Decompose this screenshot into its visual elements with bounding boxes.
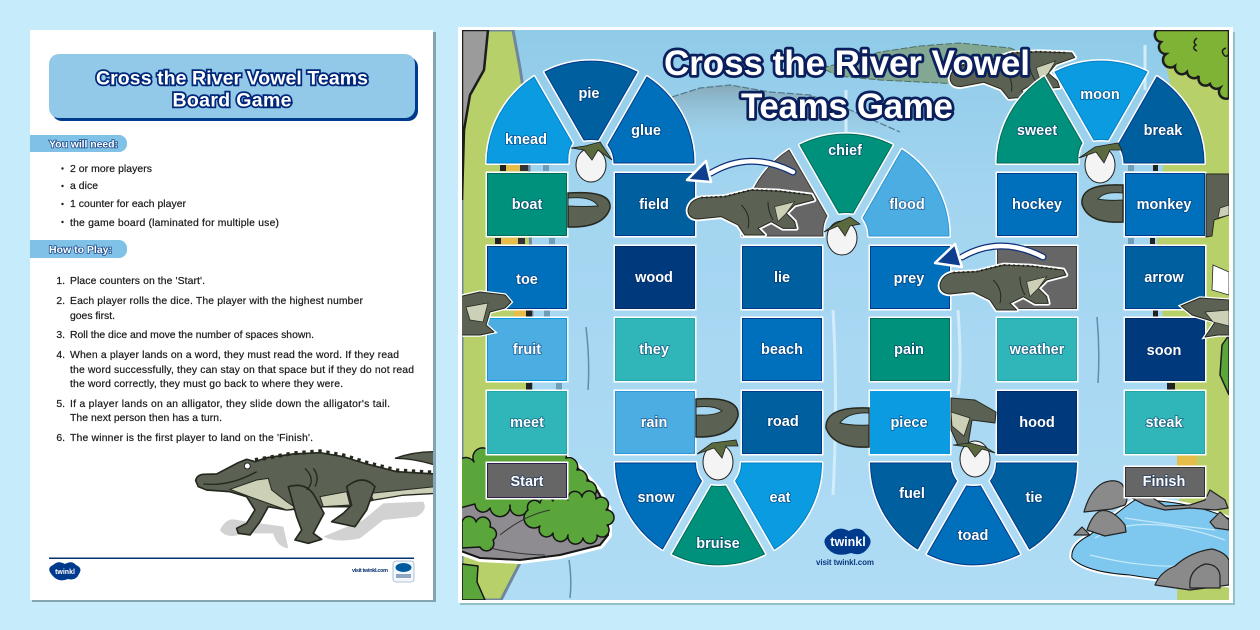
space: soon bbox=[1124, 316, 1206, 382]
space: wood bbox=[614, 244, 696, 310]
egg with hatchling 2 bbox=[824, 217, 860, 255]
space: eat: eat bbox=[770, 490, 791, 506]
list: game steps: Each player rolls the dice. The player with the highest number bbox=[70, 296, 364, 307]
space: weather bbox=[996, 316, 1078, 382]
column 3 squares bbox=[740, 244, 824, 456]
top-left arc spaces bbox=[487, 61, 694, 163]
space: soon: soon bbox=[1147, 343, 1181, 359]
logo: twinkl footer: twinkl bbox=[55, 569, 75, 576]
space: flood: flood bbox=[889, 197, 925, 213]
title: Teams Game bbox=[741, 87, 953, 126]
heading: how to play bbox=[30, 240, 127, 258]
alligator tail: beside road bbox=[826, 408, 869, 447]
alligator: right edge head bbox=[1181, 265, 1229, 337]
list: game steps bbox=[56, 276, 414, 444]
title bbox=[664, 44, 1030, 126]
bush and rock behind start bbox=[457, 436, 614, 600]
heading: how to play: How to Play: bbox=[49, 244, 112, 256]
text: board website: visit twinkl.com bbox=[816, 558, 874, 567]
space: knead: knead bbox=[505, 132, 547, 148]
space: grey alligator sector bbox=[742, 150, 827, 236]
list: materials bbox=[61, 164, 279, 229]
column 5 squares bbox=[996, 172, 1078, 456]
background: bank details between squares bbox=[495, 165, 1197, 467]
space: arrow bbox=[1124, 244, 1206, 310]
space: meet bbox=[486, 390, 568, 456]
list: game steps: Place counters on the 'Start'. bbox=[70, 276, 205, 287]
space: hockey: hockey bbox=[1012, 197, 1062, 213]
space: hood bbox=[996, 390, 1078, 456]
space: hood: hood bbox=[1019, 415, 1055, 431]
bottom-left arc spaces bbox=[616, 463, 822, 565]
space: snow: snow bbox=[637, 490, 675, 506]
space: monkey bbox=[1124, 172, 1206, 238]
space: piece bbox=[868, 390, 952, 456]
space: rain bbox=[614, 390, 696, 456]
space: chief: chief bbox=[828, 143, 862, 159]
space: sweet bbox=[997, 77, 1082, 163]
background: right edge foliage bbox=[1220, 335, 1229, 395]
space: finish: Finish bbox=[1143, 474, 1185, 490]
space: rain: rain bbox=[641, 415, 667, 431]
space: they bbox=[614, 316, 696, 382]
space: wood: wood bbox=[634, 270, 673, 286]
badge: footer quality mark bbox=[393, 561, 414, 582]
alligator: sliding to field bbox=[688, 190, 814, 235]
logo: twinkl footer bbox=[49, 562, 80, 580]
pond and rocks behind finish bbox=[1072, 481, 1232, 590]
space: pie: pie bbox=[579, 86, 599, 102]
space: sweet: sweet bbox=[1017, 123, 1057, 139]
list: game steps: 4. bbox=[56, 350, 65, 361]
alligator: sliding to prey bbox=[940, 265, 1066, 310]
list: game steps: 6. bbox=[56, 433, 65, 444]
list: materials: the game board (laminated for multiple use) bbox=[70, 218, 279, 229]
background: submerged alligators bbox=[672, 42, 1018, 132]
space: they: they bbox=[639, 342, 669, 358]
text: footer website: visit twinkl.com bbox=[352, 568, 388, 574]
space: start: Start bbox=[510, 474, 544, 490]
space: break: break bbox=[1144, 123, 1183, 139]
background: river and banks bbox=[462, 30, 1229, 600]
list: game steps: the word successfully, they can stay on that space but if they do not read bbox=[70, 365, 414, 376]
space: toe bbox=[486, 244, 568, 310]
column 1 squares bbox=[486, 172, 568, 456]
logo: twinkl board: twinkl bbox=[830, 535, 866, 549]
space: steak: steak bbox=[1145, 415, 1183, 431]
background: left cliff bbox=[462, 30, 488, 200]
alligator: top under title bbox=[948, 48, 1078, 103]
background: right bush bbox=[1155, 30, 1229, 99]
bottom-right arc spaces bbox=[870, 463, 1076, 565]
column 2 squares bbox=[614, 172, 696, 456]
space: monkey: monkey bbox=[1137, 197, 1191, 213]
space: pie bbox=[545, 61, 637, 140]
list: game steps: If a player lands on an alligator, they slide down the alligator's tail. bbox=[70, 399, 390, 410]
space: glue: glue bbox=[631, 123, 661, 139]
space: beach: beach bbox=[761, 342, 803, 358]
space: lie: lie bbox=[774, 270, 790, 286]
background: river ripple lines bbox=[569, 45, 1145, 598]
space: knead bbox=[487, 77, 572, 163]
space: boat: boat bbox=[512, 197, 542, 213]
heading: page title banner: Board Game bbox=[172, 90, 292, 112]
space: field bbox=[614, 172, 696, 238]
space: fruit: fruit bbox=[513, 342, 541, 358]
space: meet: meet bbox=[510, 415, 544, 431]
space: pain: pain bbox=[894, 342, 924, 358]
space: tie: tie bbox=[1026, 490, 1042, 506]
list: game steps: 1. bbox=[56, 276, 65, 287]
panel: game board bbox=[457, 27, 1235, 605]
alligator: head by piece and hood bbox=[951, 398, 996, 445]
space: eat bbox=[736, 463, 822, 549]
heading: page title banner: Cross the River Vowel Teams bbox=[96, 68, 368, 90]
space: beach bbox=[740, 316, 824, 382]
list: materials: a dice bbox=[70, 181, 98, 192]
alligator: left edge bbox=[458, 292, 511, 335]
logo: twinkl board bbox=[824, 529, 871, 555]
list: game steps: 5. bbox=[56, 399, 65, 410]
list: game steps: The winner is the first player to land on the 'Finish'. bbox=[70, 433, 313, 444]
space: chief bbox=[800, 134, 892, 213]
panel: instructions page bbox=[30, 30, 436, 602]
space: glue bbox=[608, 77, 694, 163]
space: fuel bbox=[870, 463, 956, 549]
list: materials: 1 counter for each player bbox=[70, 199, 187, 210]
list: game steps: 3. bbox=[56, 330, 65, 341]
space: toad: toad bbox=[958, 528, 988, 544]
space: road: road bbox=[767, 414, 799, 430]
space: field: field bbox=[639, 197, 669, 213]
space: tie bbox=[990, 463, 1076, 549]
space: weather: weather bbox=[1009, 342, 1065, 358]
background: left bank bbox=[462, 30, 532, 600]
title: Cross the River Vowel bbox=[664, 44, 1030, 83]
space: steak bbox=[1124, 390, 1206, 456]
list: game steps: the word correctly, they must go back to where they were. bbox=[70, 379, 343, 390]
space: boat bbox=[486, 172, 568, 238]
column 6 squares bbox=[1124, 172, 1206, 456]
illustration: large alligator bbox=[196, 451, 435, 548]
space: prey bbox=[868, 244, 952, 310]
list: game steps: Roll the dice and move the number of spaces shown. bbox=[70, 330, 314, 341]
alligator tail: beside rain bbox=[696, 399, 738, 437]
space: bruise bbox=[672, 486, 764, 565]
space: toad bbox=[928, 486, 1020, 565]
space: bruise: bruise bbox=[696, 536, 740, 552]
alligator tail: beside hockey bbox=[1082, 185, 1123, 222]
top-centre arc spaces bbox=[742, 134, 949, 236]
column 4 squares bbox=[868, 244, 952, 456]
space: break bbox=[1118, 77, 1204, 163]
space: piece: piece bbox=[890, 415, 928, 431]
list: game steps: The next person then has a turn. bbox=[70, 413, 222, 424]
space: moon bbox=[1055, 61, 1147, 140]
list: game steps: 2. bbox=[56, 296, 65, 307]
space: prey: prey bbox=[894, 271, 924, 287]
space: arrow: arrow bbox=[1144, 270, 1184, 286]
egg with hatchling 4 bbox=[697, 440, 738, 480]
list: materials: 2 or more players bbox=[70, 164, 152, 175]
heading: you will need bbox=[30, 135, 127, 152]
rule: footer line bbox=[49, 558, 414, 559]
egg with hatchling 1 bbox=[571, 142, 612, 182]
space: lie bbox=[740, 244, 824, 310]
space: finish bbox=[1124, 466, 1206, 498]
heading: you will need: You will need: bbox=[49, 138, 118, 150]
space: fruit bbox=[486, 316, 568, 382]
space: road bbox=[740, 390, 824, 456]
list: game steps: When a player lands on a word, they must read the word. If they read bbox=[70, 350, 399, 361]
list: game steps: goes first. bbox=[70, 311, 115, 322]
arrow: to prey bbox=[935, 244, 1043, 267]
top-right arc spaces bbox=[997, 61, 1204, 163]
space: hockey bbox=[996, 172, 1078, 238]
space: grey alligator square bbox=[996, 244, 1078, 310]
background: right bank bbox=[1157, 30, 1229, 600]
arrow: to field bbox=[687, 161, 793, 182]
space: start bbox=[486, 462, 568, 500]
space: fuel: fuel bbox=[899, 486, 925, 502]
space: toe: toe bbox=[516, 272, 538, 288]
heading: page title banner bbox=[49, 54, 418, 121]
space: pain bbox=[868, 316, 952, 382]
space: flood bbox=[863, 150, 949, 236]
space: snow bbox=[616, 463, 702, 549]
egg with hatchling 3 bbox=[1079, 143, 1122, 183]
alligator tail: beside boat bbox=[568, 193, 610, 227]
space: moon: moon bbox=[1080, 87, 1120, 103]
alligator: right edge body bbox=[1206, 174, 1229, 237]
egg with hatchling 5 bbox=[953, 441, 995, 477]
